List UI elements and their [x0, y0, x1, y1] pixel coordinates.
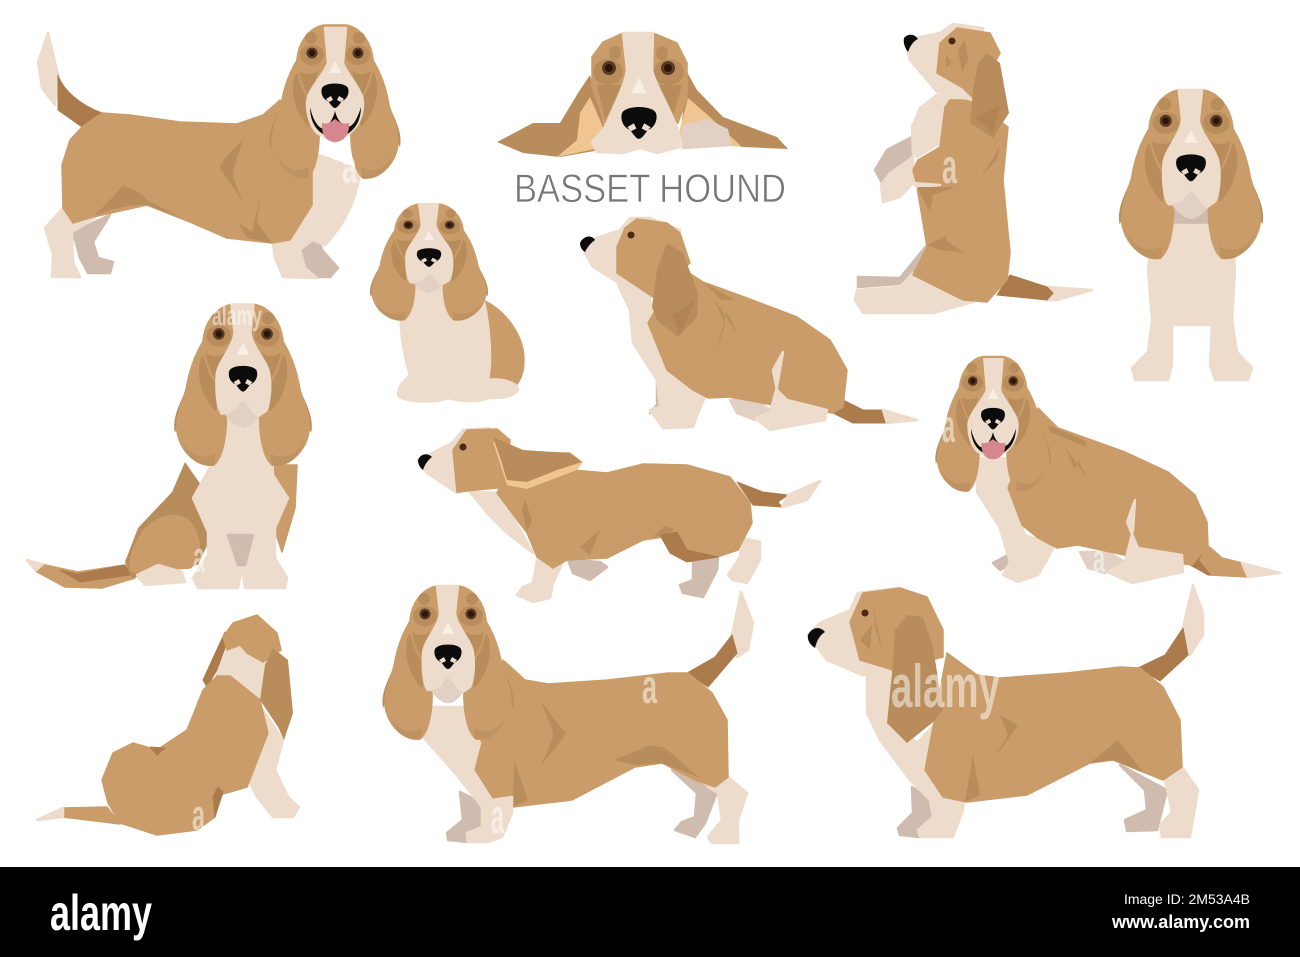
dog: lying head on paws: [497, 33, 788, 157]
watermark: a: [342, 141, 357, 194]
watermark: [192, 141, 1105, 844]
footer bar: [0, 867, 1300, 957]
watermark: a: [642, 661, 657, 714]
dog: standing, tongue out: [38, 25, 401, 278]
ear: [887, 615, 943, 743]
dog: sitting, looking left: [580, 218, 917, 430]
watermark: a: [942, 141, 957, 194]
dog: standing in profile, bottom right: [808, 585, 1203, 837]
watermark: a: [193, 533, 205, 582]
dog: walking left, ear flapping: [418, 428, 820, 602]
footer image id: Image ID: 2M53A4B: [1124, 891, 1250, 907]
dog: sitting up, looking up: [855, 24, 1092, 313]
watermark: a: [942, 400, 955, 452]
dog: sitting front, left: [27, 304, 312, 588]
dog: standing, bottom centre: [382, 586, 753, 843]
watermark: a: [491, 791, 504, 844]
ear: [970, 53, 1009, 138]
dog: puppy sitting: [370, 204, 524, 402]
dog: seen from behind: [37, 615, 299, 835]
watermark: a: [1093, 537, 1105, 581]
ear: [652, 243, 698, 337]
dog: standing front, top right: [1119, 90, 1263, 380]
watermark: alamy: [212, 300, 262, 331]
ear: [493, 442, 583, 489]
dog: sitting, tongue out, right: [935, 356, 1280, 583]
footer logo: alamy: [50, 885, 152, 941]
title: BASSET HOUND: [514, 167, 786, 211]
watermark: a: [192, 791, 205, 840]
watermark: alamy: [891, 653, 1000, 720]
footer url: www.alamy.com: [1111, 912, 1250, 932]
